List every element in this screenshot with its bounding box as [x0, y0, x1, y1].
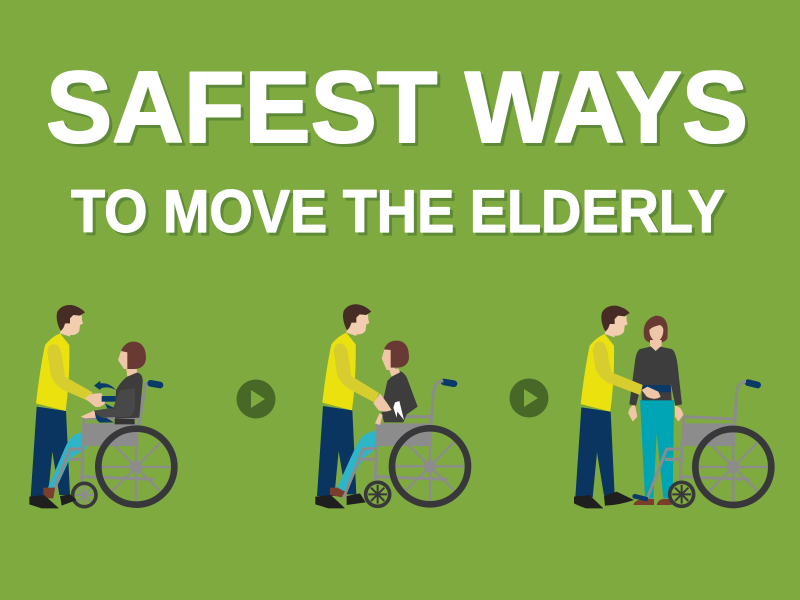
subtitle: to move the elderly: TO MOVE THE ELDERLY	[74, 181, 728, 248]
play arrow 2	[510, 378, 548, 418]
standing person	[628, 316, 683, 505]
step 2: caregiver and person leaning forward	[315, 304, 468, 508]
rotation arrows	[94, 381, 116, 423]
caregiver	[29, 305, 105, 508]
caregiver	[574, 306, 661, 508]
subtitle: to move the elderly: TO MOVE THE ELDERLY	[71, 178, 725, 245]
title: safest ways: SAFEST WAYS	[49, 55, 751, 167]
caregiver trousers	[31, 407, 70, 497]
step 1: caregiver and seated person	[29, 305, 174, 508]
caregiver trousers	[317, 406, 356, 496]
step 3: caregiver and standing person	[574, 306, 771, 508]
seated person legs	[337, 429, 380, 492]
seated person legs	[47, 431, 87, 492]
seated person	[43, 342, 146, 498]
wheelchair	[635, 382, 771, 506]
title: safest ways: SAFEST WAYS	[46, 52, 748, 164]
wheelchair	[51, 382, 174, 507]
wheelchair	[343, 381, 468, 506]
caregiver	[315, 304, 392, 508]
play arrow 1	[236, 380, 276, 418]
seated person	[330, 341, 418, 497]
